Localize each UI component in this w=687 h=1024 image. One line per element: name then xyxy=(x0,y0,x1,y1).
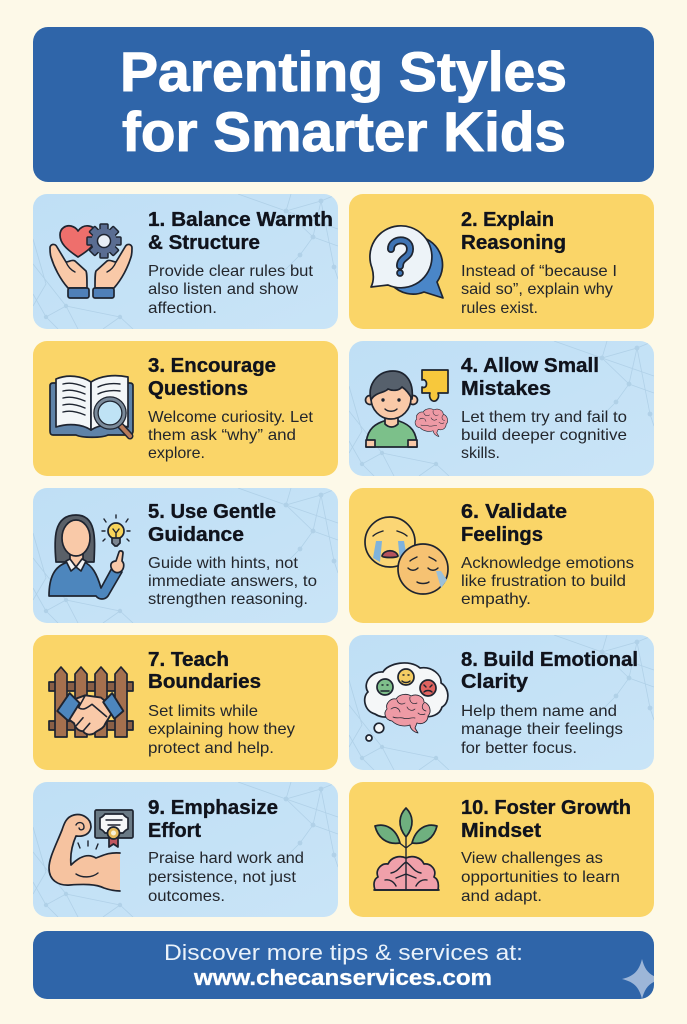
panel: 1 balance warmth and structure xyxy=(33,194,338,329)
heading: 6. Validate xyxy=(461,500,567,523)
heading: 9. Emphasize xyxy=(148,796,278,819)
footer text: Discover more tips & services at: xyxy=(164,940,523,965)
body text xyxy=(461,703,623,757)
heading xyxy=(148,648,261,693)
panel: 2 explain reasoning xyxy=(349,194,654,329)
heading xyxy=(148,796,278,842)
heading xyxy=(461,648,638,693)
panel: 7 teach boundaries xyxy=(33,635,338,770)
body text: persistence, not just xyxy=(148,869,297,886)
body text: explore. xyxy=(148,445,205,462)
icon: crying and calm faces xyxy=(365,517,448,594)
heading xyxy=(461,354,599,400)
heading: Guidance xyxy=(148,523,244,546)
body text: empathy. xyxy=(461,591,531,608)
body text xyxy=(461,263,617,317)
panel: 8 build emotional clarity xyxy=(349,635,654,770)
heading: 5. Use Gentle xyxy=(148,500,276,523)
heading xyxy=(148,208,333,254)
icon: plant growing from brain xyxy=(374,808,439,890)
body text: Let them try and fail to xyxy=(461,409,627,426)
body text: manage their feelings xyxy=(461,721,623,738)
heading: Mistakes xyxy=(461,377,551,400)
heading: Feelings xyxy=(461,523,543,546)
heading: Boundaries xyxy=(148,670,261,693)
body text: immediate answers, to xyxy=(148,573,317,590)
body text: affection. xyxy=(148,300,217,317)
body text xyxy=(461,850,620,905)
body text xyxy=(148,850,304,905)
panel: 6 validate feelings xyxy=(349,488,654,623)
body text: Acknowledge emotions xyxy=(461,555,634,572)
body text: Help them name and xyxy=(461,703,617,720)
heading: 4. Allow Small xyxy=(461,354,599,377)
heading: Reasoning xyxy=(461,231,566,254)
title: Parenting Styles xyxy=(120,40,567,103)
panel: 3 encourage questions xyxy=(33,341,338,476)
heading xyxy=(461,500,567,546)
icon: fence with handshake xyxy=(49,667,133,737)
body text: View challenges as xyxy=(461,850,603,867)
icon: sparkle xyxy=(622,959,654,998)
heading: 7. Teach xyxy=(148,648,229,671)
footer text: www.checanservices.com xyxy=(193,965,492,990)
footer banner xyxy=(33,931,662,999)
panel: 10 foster growth mindset xyxy=(349,782,654,917)
body text xyxy=(148,263,314,317)
heading xyxy=(148,354,276,400)
heading: Clarity xyxy=(461,670,529,693)
icon: woman with light bulb xyxy=(49,515,130,599)
body text: explaining how they xyxy=(148,721,295,738)
body text: skills. xyxy=(461,445,500,462)
footer text xyxy=(164,940,523,990)
body text xyxy=(148,703,295,757)
icon: flexed arm with certificate xyxy=(49,810,133,891)
body text xyxy=(461,555,634,608)
heading: Questions xyxy=(148,377,248,400)
panel: 4 allow small mistakes xyxy=(349,341,654,476)
icon: speech bubbles with question mark xyxy=(370,226,443,298)
body text: said so”, explain why xyxy=(461,281,613,298)
body text: Provide clear rules but xyxy=(148,263,314,280)
title xyxy=(120,40,567,163)
heading: 8. Build Emotional xyxy=(461,648,638,671)
heading: Effort xyxy=(148,819,201,842)
body text: them ask “why” and xyxy=(148,427,296,444)
body text: strengthen reasoning. xyxy=(148,591,308,608)
body text: and adapt. xyxy=(461,888,542,905)
heading xyxy=(461,208,566,254)
heading: 3. Encourage xyxy=(148,354,276,377)
body text: Welcome curiosity. Let xyxy=(148,409,314,426)
panel: 5 use gentle guidance xyxy=(33,488,338,623)
body text: opportunities to learn xyxy=(461,869,620,886)
body text: outcomes. xyxy=(148,888,225,905)
body text xyxy=(148,555,317,608)
panel: 9 emphasize effort xyxy=(33,782,338,917)
body text: like frustration to build xyxy=(461,573,626,590)
heading xyxy=(461,796,631,842)
body text: Set limits while xyxy=(148,703,258,720)
body text: protect and help. xyxy=(148,740,274,757)
body text: build deeper cognitive xyxy=(461,427,627,444)
body text: Praise hard work and xyxy=(148,850,304,867)
icon: open book with magnifier xyxy=(50,376,133,437)
heading: & Structure xyxy=(148,231,260,254)
icon: boy with puzzle piece and brain xyxy=(366,370,448,447)
heading: 1. Balance Warmth xyxy=(148,208,333,231)
heading: 2. Explain xyxy=(461,208,554,231)
body text: Guide with hints, not xyxy=(148,555,299,572)
body text: for better focus. xyxy=(461,740,577,757)
heading: 10. Foster Growth xyxy=(461,796,631,819)
title banner xyxy=(33,27,654,182)
icon: hands holding heart and gear xyxy=(50,224,132,298)
body text xyxy=(148,409,314,462)
body text: also listen and show xyxy=(148,281,299,298)
heading xyxy=(148,500,276,546)
icon: thought cloud with emotion faces and brain xyxy=(365,663,448,741)
body text: rules exist. xyxy=(461,300,538,317)
body text xyxy=(461,409,627,462)
title: for Smarter Kids xyxy=(122,100,566,163)
heading: Mindset xyxy=(461,819,541,842)
body text: Instead of “because I xyxy=(461,263,617,280)
